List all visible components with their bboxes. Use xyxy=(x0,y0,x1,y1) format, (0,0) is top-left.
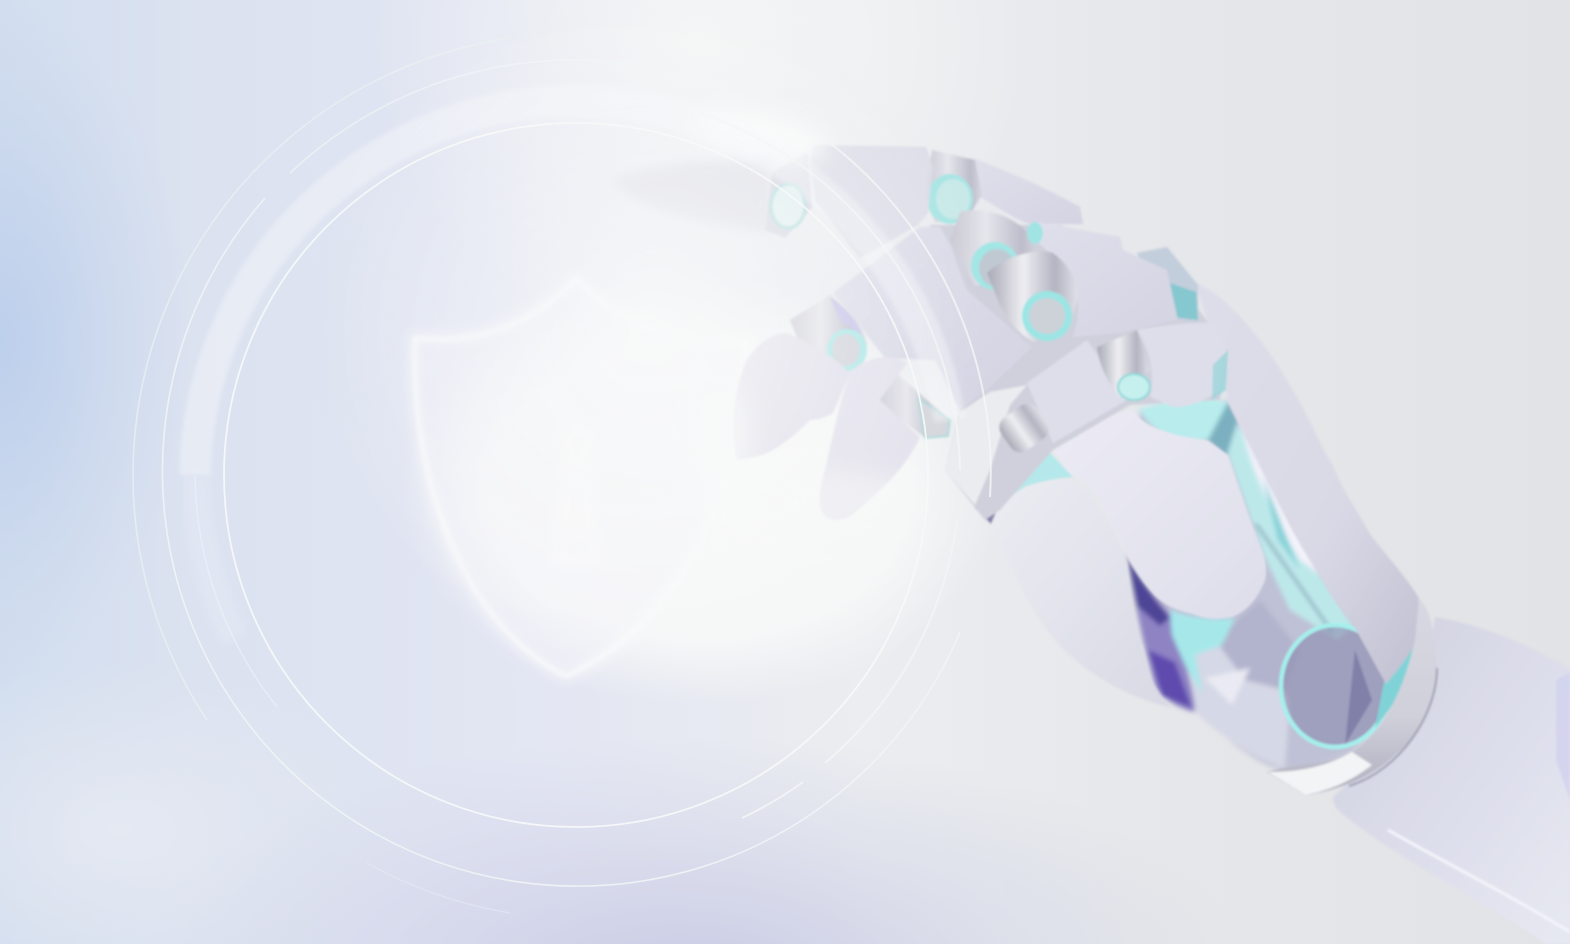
outer arcs radius 442 xyxy=(133,38,510,720)
thumb first segment xyxy=(1027,340,1127,443)
cyan palm strip xyxy=(999,452,1073,504)
thin rings radius 415 xyxy=(162,198,960,886)
pinky fingertip xyxy=(819,357,920,520)
middle finger long segment xyxy=(1030,222,1178,337)
soft wide ring band xyxy=(195,101,950,475)
wrist collar xyxy=(1267,599,1437,795)
ring fingertip xyxy=(733,333,850,460)
hand underside silhouette xyxy=(930,225,1228,520)
wrist ring xyxy=(1281,625,1389,747)
thumb second joint xyxy=(1097,330,1150,400)
back knuckle with cyan xyxy=(1137,247,1198,322)
robot hand xyxy=(612,145,1570,944)
lower band fade xyxy=(195,475,235,640)
top finger middle segment xyxy=(810,145,933,258)
glass wrist core xyxy=(1127,395,1415,770)
security rings xyxy=(133,38,991,913)
index fingertip xyxy=(612,157,772,232)
middle finger upper joint xyxy=(950,210,1043,290)
arcs radius 382 xyxy=(742,782,803,818)
pinky metal joint xyxy=(877,370,950,439)
outer back of hand plate xyxy=(1195,282,1419,684)
central palm plate xyxy=(1053,409,1266,619)
glow over fingertips xyxy=(300,0,1020,680)
bright wedge between ring finger and thumb xyxy=(945,385,1027,505)
index joint xyxy=(765,152,812,238)
forearm xyxy=(1333,617,1570,944)
middle finger lower barrel xyxy=(987,251,1078,342)
thumb second segment xyxy=(1137,323,1227,407)
ring finger joint xyxy=(790,295,867,373)
keyhole xyxy=(550,422,604,567)
ring finger long segment xyxy=(833,227,1032,410)
lower palm xyxy=(985,480,1172,708)
purple palm notch xyxy=(975,505,999,524)
shield icon xyxy=(415,279,745,676)
thumb tip metal xyxy=(995,399,1053,457)
inner ring xyxy=(224,123,928,827)
top finger joint xyxy=(925,150,982,224)
top finger upper segment xyxy=(973,158,1083,224)
